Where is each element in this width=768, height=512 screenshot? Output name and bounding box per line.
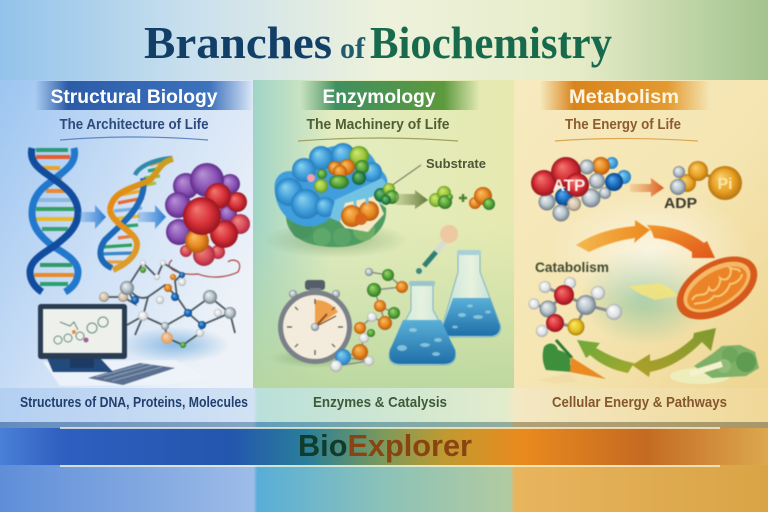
icon: vegetables right xyxy=(670,345,759,384)
title: of xyxy=(340,32,366,65)
title: Branches xyxy=(144,18,332,68)
caption: cellular energy and pathways: Cellular Energy & Pathways xyxy=(552,394,727,411)
icon: enzyme with active site xyxy=(264,143,408,258)
icon: dna double helix xyxy=(30,148,78,292)
keyboard xyxy=(43,360,207,386)
arrow: cycle bottom right xyxy=(632,328,716,377)
panel: enzymology xyxy=(264,81,501,372)
icon: energy sparks xyxy=(628,278,678,300)
heading: structural biology: Structural Biology xyxy=(50,87,218,108)
icon: substrate blob and leader line xyxy=(374,165,421,205)
icon: vegetables left xyxy=(538,340,606,383)
panel: metabolism xyxy=(528,81,768,384)
arrow: cycle top right xyxy=(647,225,715,258)
green lower lobe xyxy=(286,195,386,247)
arrow: dna to rna xyxy=(80,205,106,229)
heading: structural biology xyxy=(35,81,253,110)
bound cluster xyxy=(307,146,369,193)
subtitle: the energy of life: The Energy of Life xyxy=(565,116,681,133)
icon: molecular model xyxy=(99,260,236,363)
icon: stopwatch xyxy=(270,280,370,368)
caption: enzymes and catalysis: Enzymes & Catalysis xyxy=(313,394,447,411)
subtitle: the architecture of life: The Architecture of Life xyxy=(60,116,208,133)
icon: adp and phosphate xyxy=(670,161,742,200)
heading: metabolism: Metabolism xyxy=(569,87,679,108)
heading: enzymology xyxy=(300,81,480,110)
arrow: enzyme to products xyxy=(396,190,428,209)
label: adp: ADP xyxy=(664,195,697,212)
icon: mitochondrion xyxy=(666,243,768,333)
arrow: atp to adp xyxy=(630,178,664,197)
icon: back flask xyxy=(442,250,501,337)
icon: computer workstation xyxy=(38,304,207,386)
label: substrate: Substrate xyxy=(426,156,486,171)
monitor xyxy=(38,304,127,372)
subtitle: the machinery of life: The Machinery of Life xyxy=(306,116,450,133)
icon: front flask xyxy=(389,281,456,365)
caption: structures of dna, proteins, molecules: Structures of DNA, Proteins, Molecules xyxy=(20,394,248,411)
icon: molecule chain xyxy=(330,268,408,372)
title: Biochemistry xyxy=(370,18,612,68)
icon: dropper xyxy=(416,225,458,274)
active site pocket xyxy=(341,196,379,227)
icon: protein globule xyxy=(165,163,250,277)
icon: adp and phosphate: Pi xyxy=(717,176,733,193)
arrow: cycle bottom left xyxy=(577,340,634,373)
heading: metabolism xyxy=(540,81,710,110)
panel: structural biology xyxy=(30,81,253,386)
icon: atp molecule xyxy=(531,157,631,222)
label: atp: ATP xyxy=(553,176,585,195)
title xyxy=(144,18,612,68)
icon: twisting rna helix xyxy=(100,158,173,270)
footer banner xyxy=(0,422,768,467)
heading: enzymology: Enzymology xyxy=(322,87,436,108)
icon: products xyxy=(429,186,495,210)
arrow: cycle top left xyxy=(576,220,650,252)
blue upper lobes xyxy=(275,143,387,227)
label: catabolism: Catabolism xyxy=(535,260,609,275)
arrow: rna to protein xyxy=(138,205,166,229)
icon: substrate molecule xyxy=(528,277,622,337)
logo: bioexplorer: BioExplorer xyxy=(298,428,472,463)
